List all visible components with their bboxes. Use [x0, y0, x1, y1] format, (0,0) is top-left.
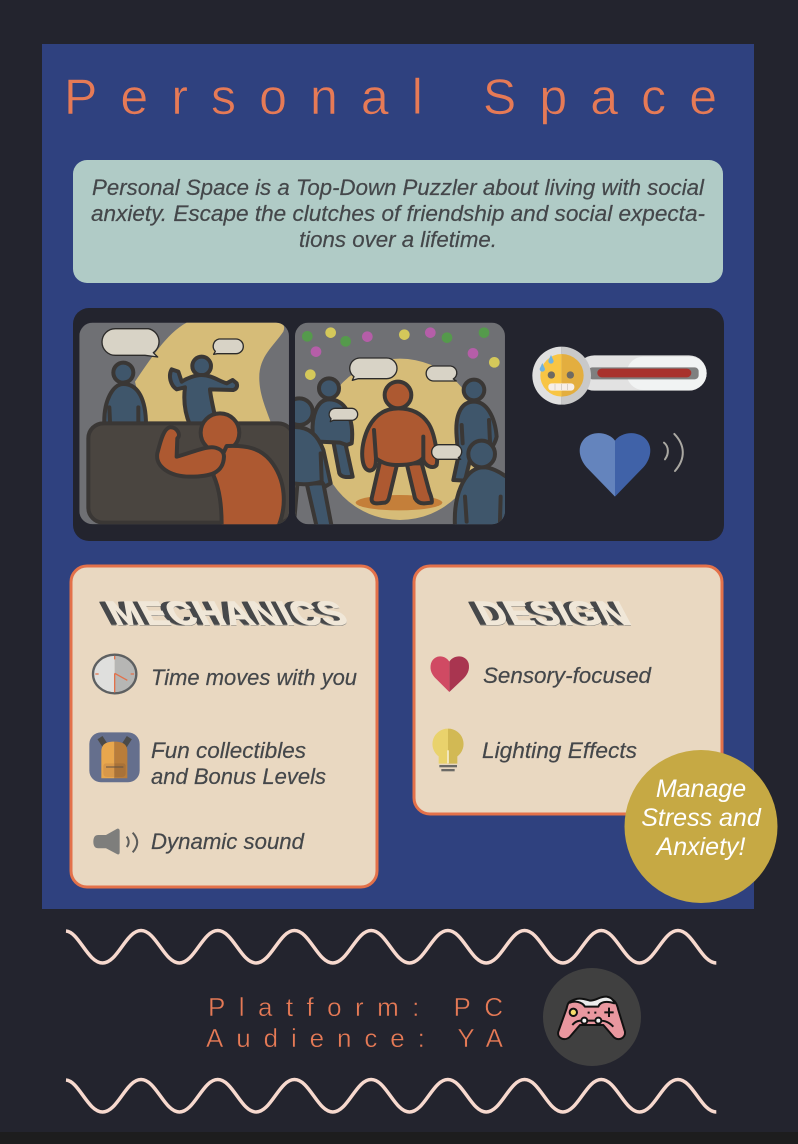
panel: description: Personal Space is a Top-Down Puzzler about living with social	[92, 175, 705, 200]
panel: description	[73, 160, 723, 283]
icon: backpack	[89, 732, 140, 782]
callout: manage stress and anxiety: Manage	[656, 775, 746, 803]
text: platform and audience	[206, 992, 504, 1053]
text: fun collectibles and bonus levels: Fun collectibles	[151, 738, 306, 763]
callout: manage stress and anxiety	[624, 750, 778, 903]
callout: manage stress and anxiety: Stress and	[641, 804, 762, 832]
comic: person in spotlight in crowd	[286, 323, 508, 527]
icon: game controller	[543, 968, 641, 1066]
beating heart icon	[580, 433, 683, 497]
panel: description: tions over a lifetime.	[299, 227, 497, 252]
icon: light bulb	[432, 729, 464, 771]
text: platform and audience: Platform: PC	[208, 992, 503, 1022]
text: time moves with you: Time moves with you	[151, 665, 357, 690]
panel: game screenshots	[73, 308, 724, 541]
heading: design: DESIGN	[468, 596, 638, 632]
icon: red heart	[430, 656, 469, 692]
stress meter	[532, 347, 707, 405]
callout: manage stress and anxiety: Anxiety!	[655, 833, 746, 861]
text: lighting effects: Lighting Effects	[482, 738, 637, 763]
wave: top	[66, 930, 716, 963]
comic: person on sofa at party	[79, 323, 293, 527]
text: fun collectibles and bonus levels: and Bonus Levels	[151, 764, 326, 789]
text: fun collectibles and bonus levels	[151, 738, 326, 789]
wave: bottom	[66, 1080, 716, 1112]
heading: mechanics: MECHANICS	[99, 596, 355, 632]
title: Personal Space	[64, 69, 717, 125]
icon: speaker	[93, 829, 137, 854]
main blue panel	[42, 44, 754, 909]
panel: description: anxiety. Escape the clutches of friendship and social expecta-	[91, 201, 705, 226]
text: dynamic sound: Dynamic sound	[151, 829, 305, 854]
text: sensory-focused: Sensory-focused	[483, 663, 652, 688]
panel: design	[414, 566, 722, 814]
text: platform and audience: Audience: YA	[206, 1023, 504, 1053]
icon: clock	[93, 655, 136, 693]
panel: mechanics	[71, 566, 381, 887]
